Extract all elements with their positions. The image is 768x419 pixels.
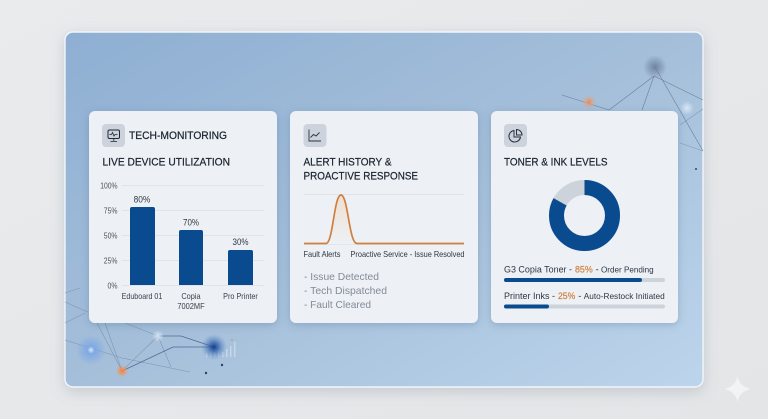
heading: alert history: ALERT HISTORY & xyxy=(304,156,392,168)
panel: toner and ink levels xyxy=(491,111,678,323)
text: response steps: - Issue Detected xyxy=(304,272,379,283)
heading: tech-monitoring: TECH-MONITORING xyxy=(129,130,227,142)
text: g3 copia toner: - xyxy=(596,264,599,276)
heading: alert history xyxy=(304,156,418,182)
bar chart: device utilization: 75% xyxy=(104,206,118,216)
bar chart: device utilization: Copia xyxy=(181,292,201,301)
bar chart: device utilization: 7002MF xyxy=(177,302,205,311)
bar chart: device utilization: Pro Printer xyxy=(223,292,258,301)
panel: tech monitoring xyxy=(89,111,277,323)
bar chart: device utilization: 70% xyxy=(183,218,199,228)
icon: monitor xyxy=(102,124,125,147)
text: printer inks xyxy=(504,291,665,302)
network decoration: top right xyxy=(562,55,703,170)
heading: alert history: PROACTIVE RESPONSE xyxy=(304,170,418,182)
bar chart: device utilization: 25% xyxy=(104,256,118,266)
network decoration: bottom left xyxy=(65,288,236,377)
bar chart: device utilization: 30% xyxy=(232,237,248,247)
bar chart: device utilization: Eduboard 01 xyxy=(122,292,163,301)
text: response steps: - Fault Cleared xyxy=(304,300,371,311)
text: printer inks: - xyxy=(578,291,582,302)
line chart: fault alerts: Fault Alerts xyxy=(304,250,340,259)
text: g3 copia toner: 85% xyxy=(575,264,593,276)
panel: alert history xyxy=(290,111,478,323)
icon: pie chart xyxy=(504,124,527,147)
heading: toner and ink levels: TONER & INK LEVELS xyxy=(504,156,608,168)
text: response steps xyxy=(304,272,387,311)
progress bar: g3 copia toner xyxy=(504,278,665,282)
text: printer inks: Printer Inks - xyxy=(504,291,555,302)
bar chart: device utilization: 80% xyxy=(134,194,150,204)
heading: live device utilization: LIVE DEVICE UTILIZATION xyxy=(102,156,230,168)
text: printer inks: Auto-Restock Initiated xyxy=(584,291,665,301)
bar chart: device utilization xyxy=(100,182,264,311)
text: printer inks: 25% xyxy=(558,291,576,302)
bar chart: device utilization: 50% xyxy=(104,232,118,240)
bar chart: device utilization: 100% xyxy=(100,182,118,190)
text: g3 copia toner: Order Pending xyxy=(601,264,654,274)
line chart: fault alerts: Proactive Service - Issue Resolved xyxy=(350,250,465,259)
line chart: fault alerts xyxy=(304,194,465,259)
bar chart: device utilization: 0% xyxy=(108,282,118,290)
dashboard panel xyxy=(65,32,703,387)
icon: line chart xyxy=(304,124,326,147)
progress bar: printer inks xyxy=(504,304,665,308)
text: g3 copia toner xyxy=(504,264,654,276)
icon: sparkle xyxy=(724,376,750,402)
text: g3 copia toner: G3 Copia Toner - xyxy=(504,264,572,276)
donut chart xyxy=(556,188,612,244)
text: response steps: - Tech Dispatched xyxy=(304,286,387,297)
